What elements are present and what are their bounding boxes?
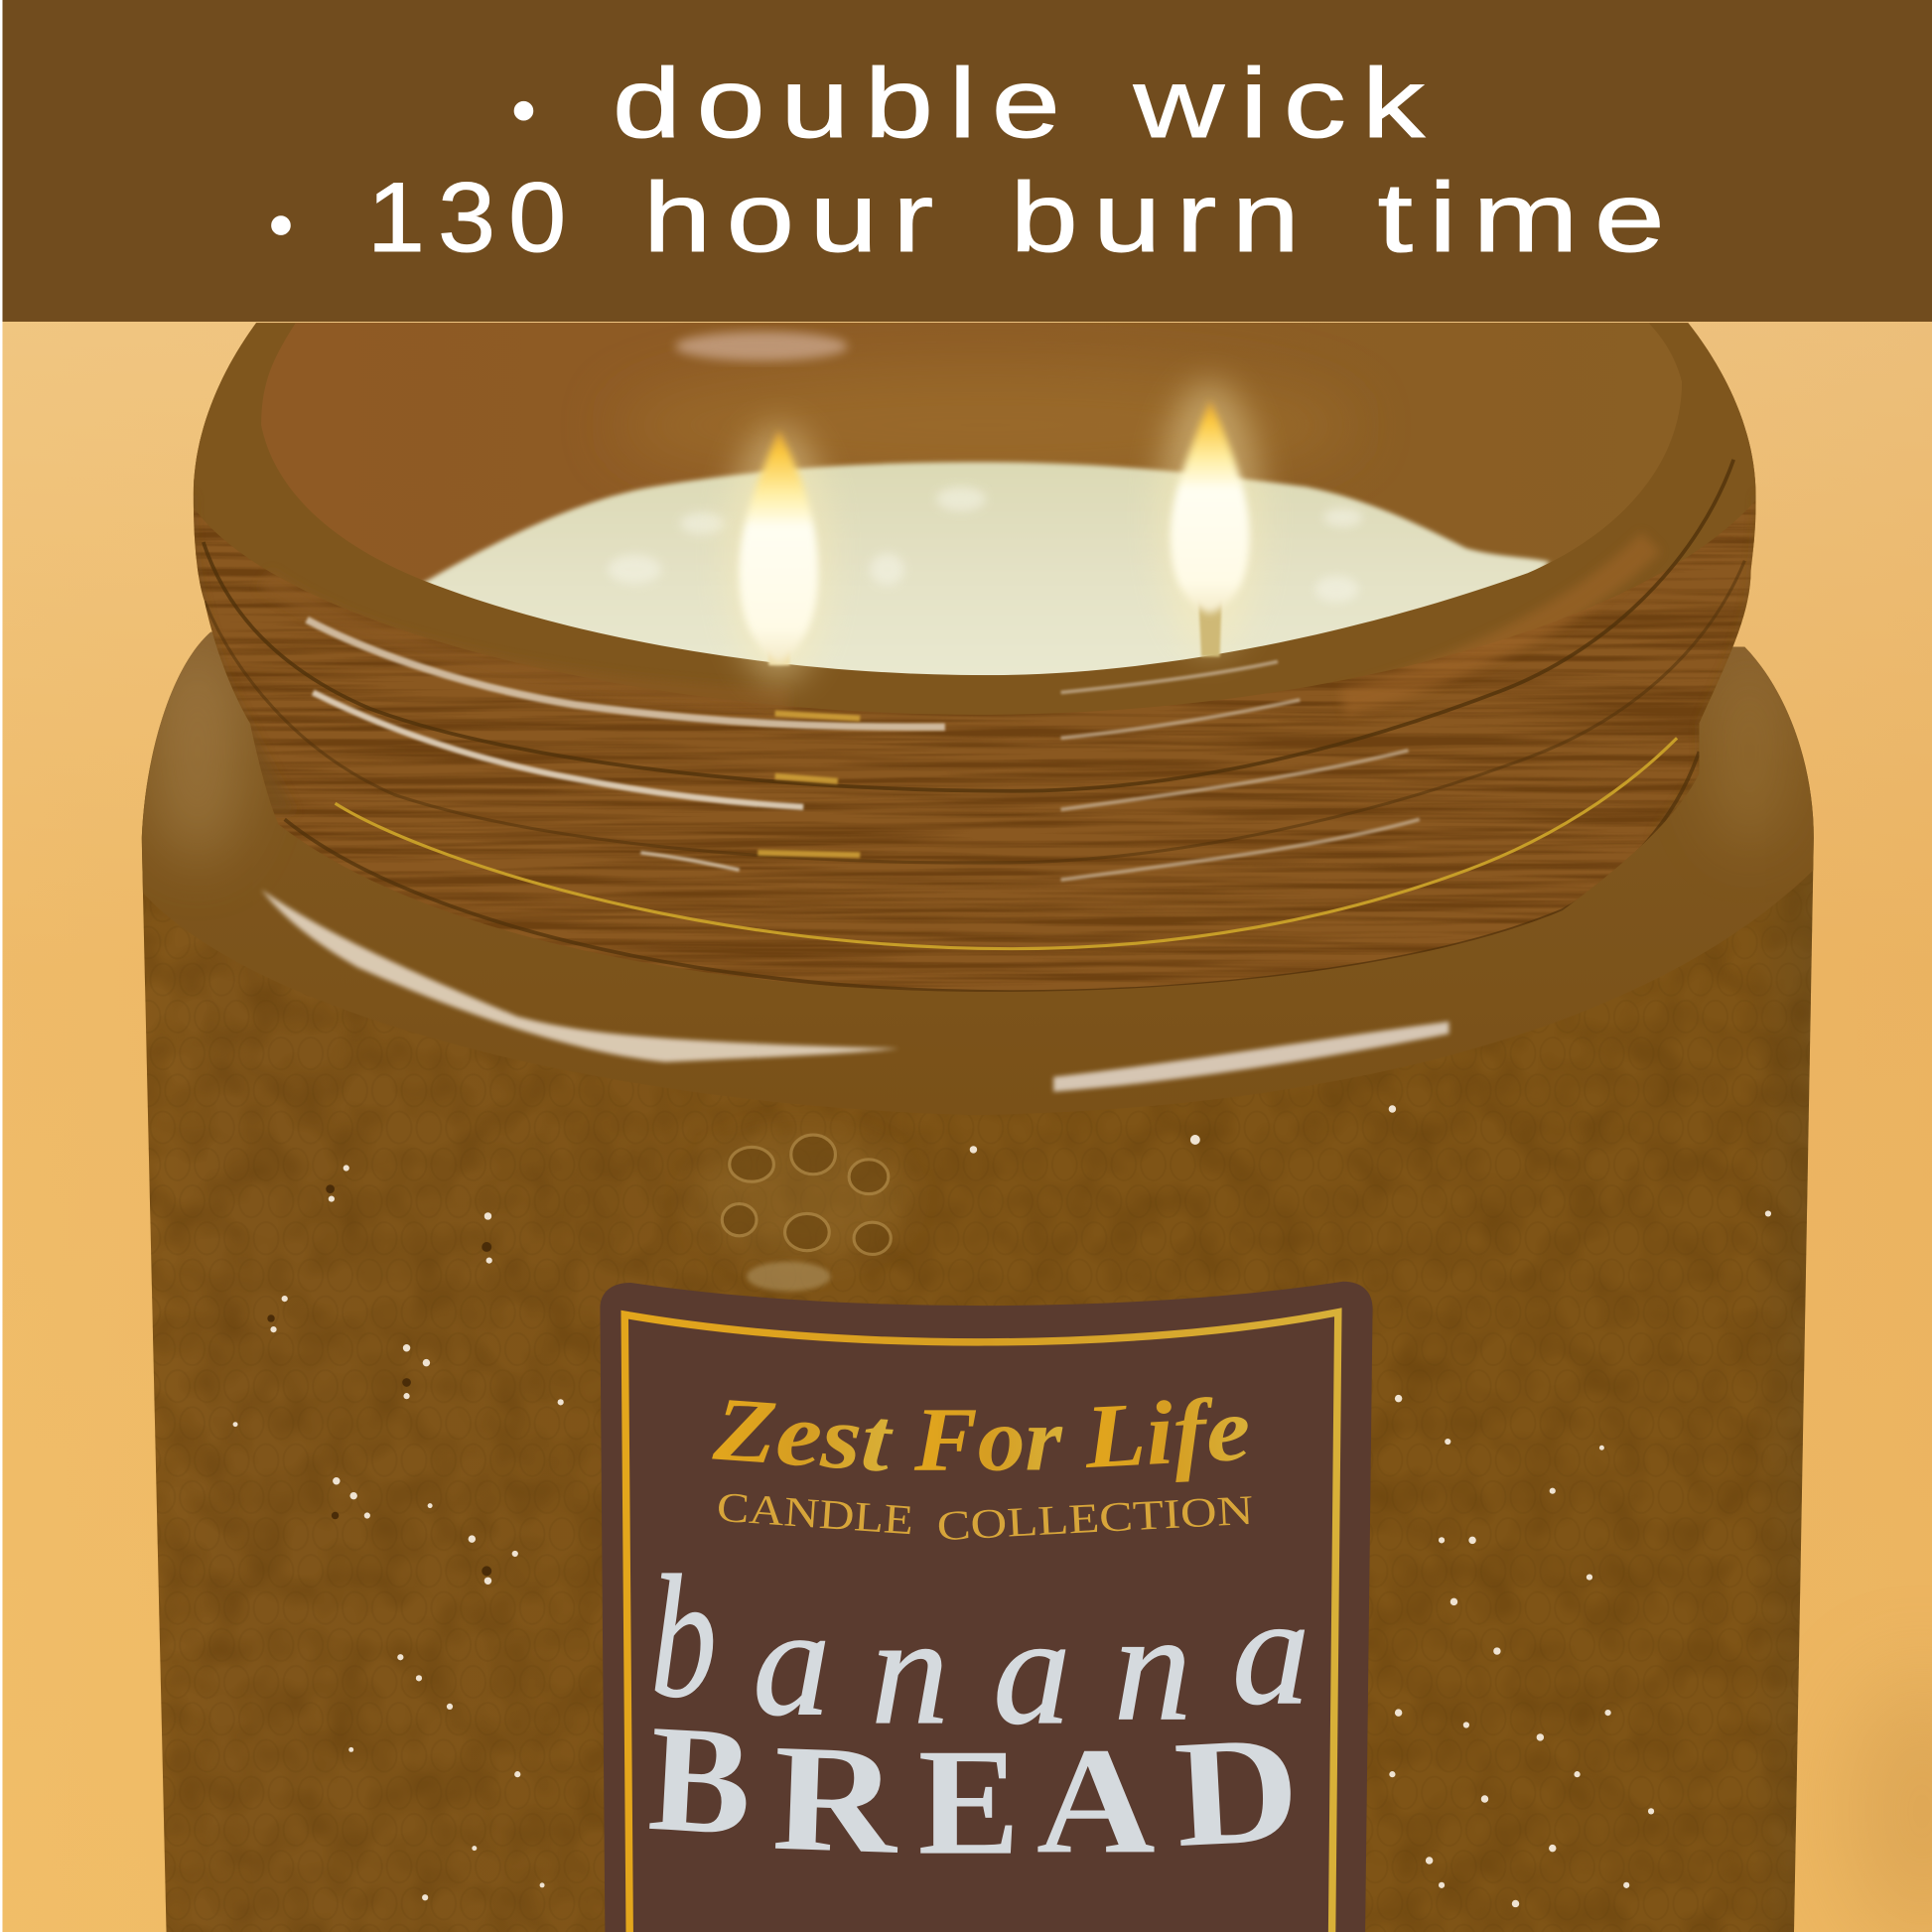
BREAD wordmark: B <box>645 1694 756 1867</box>
collection line <box>715 1484 1254 1550</box>
BREAD wordmark: A <box>1036 1716 1156 1885</box>
banana wordmark: n <box>1114 1581 1191 1752</box>
thread white highlight lower left <box>313 692 803 807</box>
BREAD wordmark <box>645 1694 1304 1887</box>
background shadow lower right <box>1849 1676 1932 1932</box>
candle jar photo <box>123 323 1836 1932</box>
banana wordmark: a <box>1232 1565 1310 1736</box>
brand name <box>710 1378 1253 1491</box>
shoulder soft glow left <box>148 640 246 863</box>
banana wordmark: a <box>993 1585 1070 1756</box>
banana wordmark: b <box>650 1540 717 1733</box>
feature: time: time <box>1378 163 1681 273</box>
banana wordmark: a <box>753 1576 830 1747</box>
feature: burn: burn <box>1011 163 1314 273</box>
neck outer edge right shade <box>1651 492 1811 838</box>
honeycomb flower cells <box>722 1135 891 1254</box>
left white margin <box>0 0 2 1932</box>
shoulder and texture layers <box>123 617 1836 1932</box>
feature: double: double <box>613 49 1075 159</box>
bullet one <box>514 101 533 120</box>
collection line: COLLECTION <box>936 1487 1254 1550</box>
label background <box>600 1282 1373 1932</box>
melted wax specks <box>608 486 1363 603</box>
neck wood-like stripes <box>148 323 1811 1001</box>
wax surface <box>419 462 1550 702</box>
thread gold glints <box>758 714 860 855</box>
shoulder gloss highlight right <box>1053 1022 1449 1092</box>
bullet two <box>272 216 290 234</box>
BREAD wordmark: E <box>918 1719 1020 1887</box>
collection line: CANDLE <box>715 1484 915 1544</box>
feature: 130: 130 <box>367 163 579 273</box>
jar body <box>142 632 1814 1932</box>
label top reflection <box>747 1262 830 1292</box>
thread gold line <box>336 738 1677 949</box>
ring orange band left <box>262 574 699 697</box>
shoulder gloss highlight left <box>261 890 899 1062</box>
right flame and wick <box>1159 382 1262 656</box>
dark specks <box>267 1184 491 1576</box>
glossy shoulder <box>141 631 1814 897</box>
thread thin highlights right <box>640 661 1420 880</box>
sparkle highlights <box>233 1105 1771 1907</box>
feature: wick: wick <box>1133 49 1441 159</box>
header text: features <box>272 49 1681 273</box>
outer edge shade <box>148 492 296 813</box>
left flame and wick <box>727 425 830 684</box>
brand name: For <box>913 1389 1063 1490</box>
brand name: Life <box>1081 1378 1253 1487</box>
jar interior <box>261 323 1682 675</box>
orange glow band <box>1343 542 1651 702</box>
BREAD wordmark: D <box>1171 1704 1304 1879</box>
gold foil border <box>624 1312 1338 1932</box>
banana wordmark <box>650 1540 1310 1756</box>
feature: hour: hour <box>643 163 949 273</box>
shoulder soft glow right <box>1710 686 1789 830</box>
BREAD wordmark: R <box>770 1713 903 1886</box>
interior warm glow <box>617 363 1355 486</box>
product label <box>600 1282 1373 1932</box>
threaded neck and rim <box>194 323 1756 992</box>
header band <box>2 0 1932 322</box>
banana wordmark: n <box>871 1585 949 1756</box>
interior glass reflection <box>675 332 848 361</box>
honeycomb flower highlight <box>707 1144 896 1253</box>
thread dark lines <box>204 460 1744 992</box>
thread white highlight upper left <box>307 620 945 727</box>
embossed honeycomb texture <box>123 850 1836 1932</box>
brand name: Zest <box>710 1378 897 1491</box>
rim lip and top ring <box>185 323 1762 715</box>
